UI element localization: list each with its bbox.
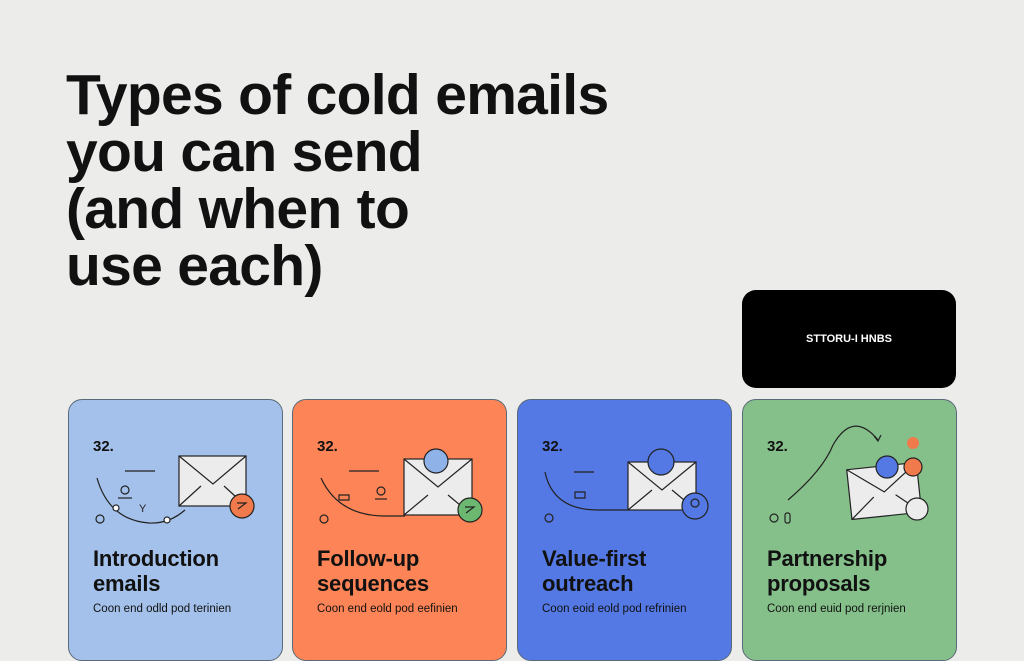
card: introduction emails: emails — [93, 571, 160, 596]
title: you can send — [66, 120, 422, 184]
card: follow-up sequences — [292, 399, 507, 661]
card: follow-up sequences: Follow-up — [317, 546, 419, 571]
illustration: value-first — [544, 448, 709, 523]
card: follow-up sequences: Coon end eold pod eefinien — [317, 603, 458, 615]
card: introduction emails: Coon end odld pod terinien — [93, 603, 231, 615]
illustration: follow-up — [319, 448, 483, 524]
black label box — [742, 290, 956, 388]
title — [66, 63, 608, 298]
card: value-first outreach: 32. — [542, 438, 563, 455]
card: follow-up sequences: sequences — [317, 571, 429, 596]
card: value-first outreach: Coon eoid eold pod refrinien — [542, 603, 686, 615]
card: value-first outreach: Value-first — [542, 546, 646, 571]
card: follow-up sequences: 32. — [317, 438, 338, 455]
card: partnership proposals: Coon end euid pod rerjnien — [767, 603, 906, 615]
black label box: STTORU-I HNBS — [806, 333, 892, 345]
card: partnership proposals: proposals — [767, 571, 870, 596]
title: (and when to — [66, 177, 409, 241]
card: value-first outreach: outreach — [542, 571, 633, 596]
card: introduction emails — [68, 399, 283, 661]
card: partnership proposals: Partnership — [767, 546, 887, 571]
title: Types of cold emails — [66, 63, 608, 127]
illustration: partnership — [769, 426, 929, 524]
card: introduction emails: 32. — [93, 438, 114, 455]
illustration: intro: Y — [139, 503, 147, 515]
card: introduction emails: Introduction — [93, 546, 219, 571]
card: value-first outreach — [517, 399, 732, 661]
title: use each) — [66, 234, 323, 298]
card: partnership proposals: 32. — [767, 438, 788, 455]
illustration: intro — [95, 455, 255, 524]
card: partnership proposals — [742, 399, 957, 661]
